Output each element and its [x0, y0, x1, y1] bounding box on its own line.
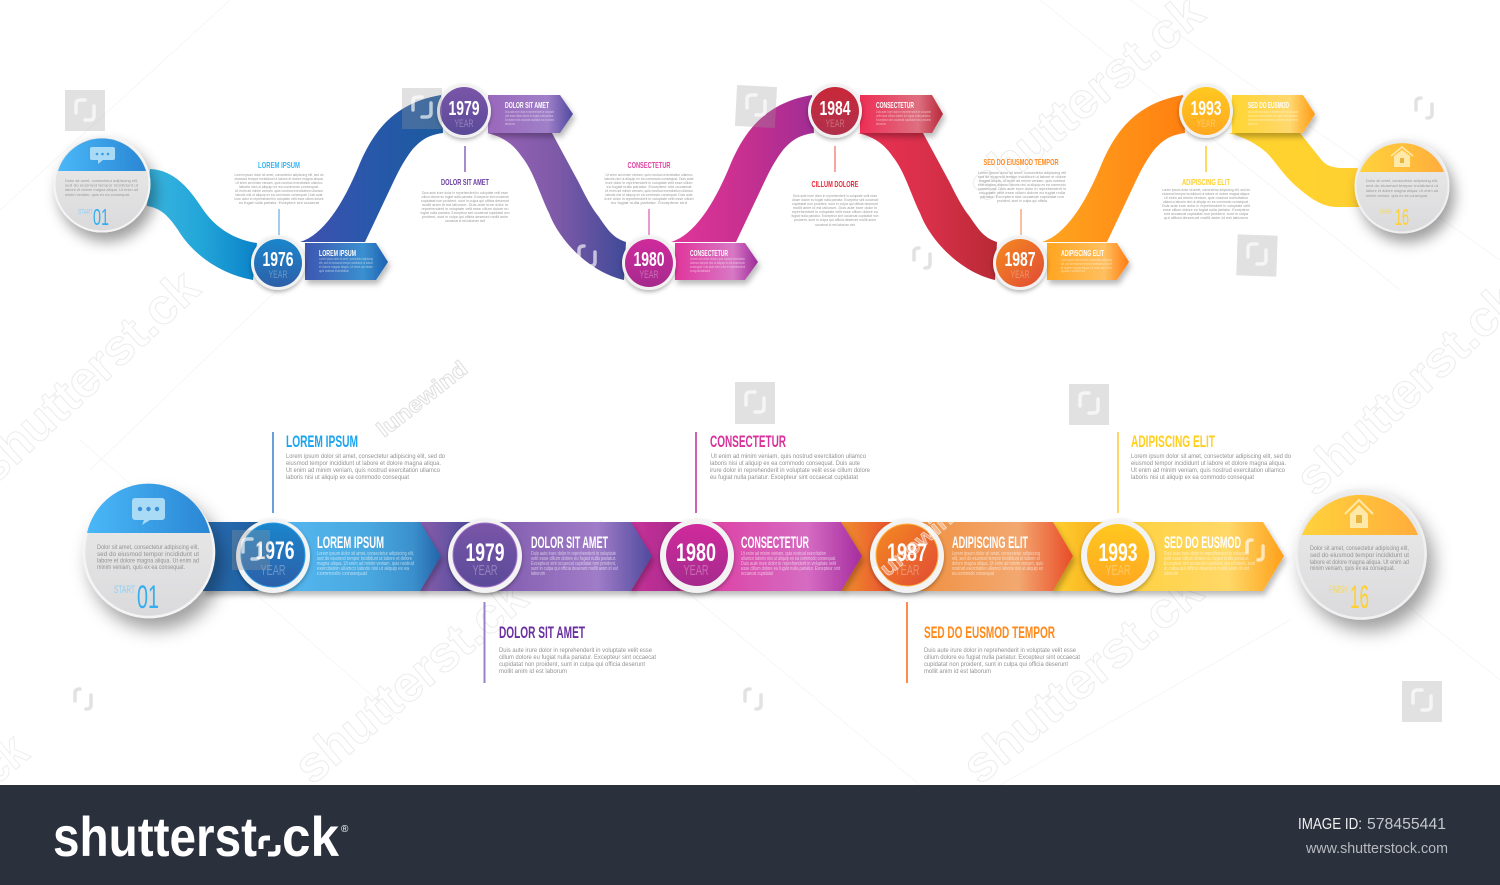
note: consectetur (top) — [604, 160, 694, 205]
band segment: 1980 magenta — [630, 522, 862, 591]
arrow tag: 1987: Lorem ipsum dolor sit amet, consectetur adipiscing — [1061, 258, 1112, 262]
finish circle large: FINISH — [1329, 584, 1347, 596]
year node: 1980: YEAR — [640, 269, 659, 281]
band text: consectetur — [741, 534, 840, 577]
note: sed do eiusmod tempor (top): Lorem ipsum dolor sit amet, consectetur adipiscing elit — [978, 170, 1067, 175]
start circle — [54, 136, 150, 232]
note: cillum dolore (top) — [792, 179, 879, 227]
arrow tag: 1984: velit esse cillum dolore eu fugiat nulla pariatur. — [876, 114, 931, 118]
year node: 1979 large: 1979 — [466, 539, 504, 567]
band text: lorem ipsum: LOREM IPSUM — [317, 534, 384, 552]
start cap large — [87, 484, 210, 533]
start circle text: sed do eiusmod tempor incididunt ut — [65, 182, 139, 188]
note: adipiscing elit (top): eiusmod tempor incididunt ut labore et dolore magna aliqua. — [1162, 191, 1250, 196]
note: consectetur (bottom): eu fugiat nulla pariatur. Excepteur sint occaecat cupidatat — [710, 475, 858, 481]
note: lorem ipsum (top): laboris nisi ut aliquip ex ea commodo consequat. Duis aute — [236, 192, 323, 197]
band text: lorem ipsum: Lorem ipsum dolor sit amet, consectetur adipiscing elit, — [317, 551, 414, 557]
start text large: labore et dolore magna aliqua. Ut enim ad — [97, 558, 199, 564]
finish circle text: minim veniam, quis ex ea consequat. — [1366, 193, 1428, 198]
note: lorem ipsum (bottom): eiusmod tempor incididunt ut labore et dolore magna aliqua. — [286, 461, 441, 467]
arrow tag: 1993: velit esse cillum dolore eu fugiat nulla pariatur. — [1248, 114, 1298, 118]
year node: 1980 large: YEAR — [684, 562, 709, 579]
arrow tag: 1976: elit, sed do eiusmod tempor incididunt ut labore — [319, 261, 373, 265]
image id — [1298, 816, 1446, 833]
year node: 1987: YEAR — [1010, 269, 1030, 281]
finish circle large — [1296, 490, 1426, 618]
arrow tag: 1987: quis nostrud — [1061, 269, 1085, 273]
arrow tag: 1976 — [305, 243, 388, 280]
arrow tag: 1976: LOREM IPSUM — [319, 248, 356, 258]
note: lorem ipsum (bottom): LOREM IPSUM — [286, 432, 358, 451]
bottom straight timeline — [84, 432, 1426, 683]
note: lorem ipsum (bottom): Lorem ipsum dolor sit amet, consectetur adipiscing elit, sed do — [286, 454, 446, 460]
footer logo: ck — [282, 805, 340, 868]
arrow tag: 1987: ADIPISCING ELIT — [1061, 248, 1104, 258]
band text: dolor sit amet: Excepteur sint occaecat cupidatat non proident, — [531, 561, 616, 567]
arrow tag: 1984: CONSECTETUR — [876, 100, 914, 110]
note: lorem ipsum (top): Lorem ipsum dolor sit amet, consectetur adipiscing elit, sed do — [234, 172, 324, 177]
band text: consectetur: Ut enim ad minim veniam, quis nostrud exercitation — [741, 551, 826, 557]
finish circle cap — [1360, 143, 1444, 172]
arrow tag: 1979 — [488, 95, 573, 133]
note: sed do eusmod tempor (bottom): cupidatat non proident, sunt in culpa qui officia deserunt — [924, 662, 1068, 668]
start number: 01 — [93, 204, 109, 230]
image id: 578455441 — [1367, 816, 1446, 833]
note: sed do eusmod tempor (bottom): Duis aute irure dolor in reprehenderit in voluptate velit esse — [924, 648, 1077, 654]
year node: 1993 large: 1993 — [1098, 539, 1138, 567]
arrow tag: 1984: Duis aute irure dolor in reprehenderit in voluptate — [876, 110, 931, 114]
band text: sed do eusmod: in culpa qui officia deserunt mollit anim id est — [1164, 566, 1250, 572]
note: adipiscing elit (top): esse cillum dolore eu fugiat nulla pariatur. Excepteur — [1163, 207, 1250, 212]
band text: adipiscing elit: ADIPISCING ELIT — [952, 534, 1028, 552]
arrow tag: 1987: et dolore magna aliqua. Ut enim ad minim — [1061, 266, 1112, 270]
year node: 1976 large — [236, 519, 310, 593]
arrow tag: 1979: DOLOR SIT AMET — [505, 100, 549, 110]
finish text large: minim veniam, quis ex ea consequat. — [1310, 566, 1395, 572]
website: www.shutterstock.com — [1305, 840, 1448, 857]
ribbon: 1987 to 1993 — [1042, 95, 1185, 242]
year node: 1993 large: YEAR — [1106, 562, 1131, 579]
band text: sed do eusmod: SED DO EUSMOD — [1164, 534, 1241, 552]
note: dolor sit amet (top): fugiat nulla pariatur. Excepteur sint occaecat cupidatat non — [420, 210, 510, 215]
band text: dolor sit amet: Duis aute irure dolor in reprehenderit in voluptate — [531, 551, 616, 557]
band text: sed do eusmod: Excepteur sint occaecat cupidatat non proident, sunt — [1164, 561, 1255, 567]
finish circle text: sed do eiusmod tempor incididunt ut — [1366, 183, 1439, 188]
note: dolor sit amet (top): reprehenderit in voluptate velit esse cillum dolore eu — [422, 206, 508, 211]
arrow tag: 1984: Excepteur sint occaecat cupidatat non proident — [876, 118, 931, 122]
ribbon: 1993 to finish — [1228, 133, 1362, 207]
note: adipiscing elit (bottom): ADIPISCING ELIT — [1131, 432, 1215, 451]
year node: 1993 — [1179, 84, 1233, 138]
note: dolor sit amet (top): occaecat id est laborum sint — [445, 218, 486, 223]
note: consectetur (top): CONSECTETUR — [628, 160, 670, 170]
finish number large: 16 — [1350, 579, 1369, 615]
arrow tag: 1979: velit esse cillum dolore eu fugiat nulla pariatur. — [505, 114, 554, 118]
note: lorem ipsum (top): laboris nisi ut aliquip ex ea commodo consequat. — [239, 184, 319, 189]
year node: 1993: YEAR — [1196, 118, 1216, 130]
band text: consectetur: ullamco laboris nisi ut aliquip ex ea commodo consequat. — [741, 556, 836, 562]
note: dolor sit amet (bottom) — [484, 602, 656, 683]
watermark: lunewind: lunewind — [372, 356, 472, 442]
note: adipiscing elit (top): sint occaecat cupidatat non proident, sunt in culpa — [1164, 211, 1249, 216]
year node: 1984: 1984 — [820, 98, 851, 120]
note: consectetur (top): eu fugiat nulla pariatur. Excepteur sint — [611, 200, 688, 205]
image id: IMAGE ID: — [1298, 816, 1362, 833]
band text: consectetur: occaecat cupidatat — [741, 571, 773, 577]
arrow tag: 1980: ullamco laboris nisi ut aliquip ex ea commodo — [690, 261, 745, 265]
note: sed do eusmod tempor (bottom) — [906, 602, 1080, 683]
year node: 1987 — [993, 236, 1047, 290]
note: adipiscing elit (bottom): Ut enim ad minim veniam, quis nostrud exercitation ullamco — [1131, 468, 1286, 474]
footer logo: ® — [341, 824, 349, 835]
year node: 1980: 1980 — [634, 249, 664, 271]
ribbon: 1976 to 1979 — [300, 95, 443, 242]
start text large: sed do eiusmod tempor incididunt ut — [97, 552, 199, 558]
band text: dolor sit amet: DOLOR SIT AMET — [531, 534, 608, 552]
note: dolor sit amet (top): cillum dolore eu fugiat nulla pariatur. Excepteur sint occaecat — [422, 194, 509, 199]
watermark: shutterstock lower right: shutterst.ck — [951, 562, 1213, 794]
start number large: 01 — [137, 579, 159, 615]
arrow tag: 1980: Ut enim ad minim veniam, quis nostrud exercitation — [690, 257, 745, 261]
note: sed do eiusmod tempor (top): magna aliqua. Ut enim ad minim veniam, quis nostrud — [979, 178, 1065, 183]
arrow tag: 1979: Excepteur sint occaecat cupidatat non proident — [505, 118, 554, 122]
note: dolor sit amet (top): mollit anim id est laborum. Duis aute irure dolor in — [422, 202, 508, 207]
note: adipiscing elit (top): Lorem ipsum dolor sit amet, consectetur adipiscing elit, sed do — [1162, 187, 1251, 192]
note: cillum dolore (top): reprehenderit in voluptate velit esse cillum dolore eu — [792, 209, 878, 214]
note: consectetur (bottom): CONSECTETUR — [710, 432, 786, 451]
arrow tag: 1979: laborum — [505, 122, 515, 126]
band text: lorem ipsum: magna aliqua. Ut enim ad minim veniam, quis nostrud — [317, 561, 414, 567]
note: adipiscing elit (top): ADIPISCING ELIT — [1182, 177, 1231, 187]
year node: 1987 large: 1987 — [887, 539, 927, 567]
year node: 1987 large — [870, 519, 944, 593]
year node: 1980 — [622, 236, 676, 290]
icon: house — [1391, 147, 1413, 167]
band text: consectetur: Duis aute irure dolor in reprehenderit in voluptate velit — [741, 561, 836, 567]
icon: house large — [1345, 500, 1373, 528]
arrow tag: 1976: et dolore magna aliqua. Ut enim ad minim — [319, 265, 373, 269]
arrow tag: 1993: Excepteur sint occaecat cupidatat non proident — [1248, 118, 1298, 122]
note: cillum dolore (top): mollit anim id est laborum. Duis aute irure dolor in — [793, 205, 877, 210]
note: dolor sit amet (top) — [420, 177, 510, 223]
arrow tag: 1976: quis nostrud exercitation — [319, 269, 349, 273]
year node: 1976: 1976 — [262, 249, 294, 271]
note: consectetur (bottom): irure dolor in reprehenderit in voluptate velit esse cillum dolore — [710, 468, 871, 474]
note: adipiscing elit (top) — [1162, 177, 1251, 220]
note: cillum dolore (top): cillum dolore eu fugiat nulla pariatur. Excepteur sint occaecat — [792, 197, 879, 202]
start label large: START — [114, 584, 135, 596]
note: sed do eiusmod tempor (top): sed do eiusmod tempor incididunt ut labore et dolore — [978, 174, 1067, 179]
band text: dolor sit amet: laborum — [531, 571, 545, 577]
note: sed do eiusmod tempor (top): SED DO EIUSMOD TEMPOR — [984, 157, 1058, 167]
year node: 1976 — [251, 236, 305, 290]
start text large — [97, 545, 199, 571]
band segment: 1987 orange — [841, 522, 1073, 591]
note: consectetur (top): Ut enim ad minim veniam, quis nostrud exercitation ullamco — [605, 188, 694, 193]
year node: 1993 large — [1081, 519, 1155, 593]
connector: 1987 — [1020, 209, 1022, 235]
start circle large — [84, 484, 214, 617]
finish circle — [1356, 140, 1448, 232]
note: dolor sit amet (bottom): cillum dolore eu fugiat nulla pariatur. Excepteur sint occaecat — [499, 655, 656, 661]
arrow tag: 1980: CONSECTETUR — [690, 248, 728, 258]
year node: 1976 large: YEAR — [260, 562, 286, 579]
start circle cap — [58, 138, 146, 171]
note: lorem ipsum (top): eu fugiat nulla pariatur. Excepteur sint occaecat — [239, 200, 320, 205]
note: adipiscing elit (top): Duis aute irure dolor in reprehenderit in voluptate velit — [1162, 203, 1251, 208]
arrow tag: 1976: Lorem ipsum dolor sit amet, consectetur adipiscing — [319, 257, 373, 261]
note: cillum dolore (top): fugiat nulla pariatur. Excepteur sint occaecat cupidatat non — [792, 213, 878, 218]
note: consectetur (top): laboris nisi ut aliquip ex ea commodo consequat. Duis aute — [604, 176, 694, 181]
icon: speech bubble large — [132, 498, 165, 525]
year node: 1993: 1993 — [1190, 98, 1222, 120]
band text: lorem ipsum: commodo consequat — [317, 571, 368, 577]
year node: 1979 large — [448, 519, 522, 593]
note: sed do eiusmod tempor (top): proident, sunt in culpa qui officia — [997, 198, 1048, 203]
band segment: 1976 blue — [203, 522, 441, 591]
note: sed do eiusmod tempor (top): exercitation ullamco laboris nisi ut aliquip ex ea commodo — [978, 182, 1067, 187]
finish text large — [1310, 546, 1409, 572]
year node: 1987 large: YEAR — [894, 562, 920, 579]
start circle text — [65, 178, 139, 197]
note: consectetur (top): eu fugiat nulla pariatur. Excepteur sint occaecat — [606, 184, 692, 189]
note: cillum dolore (top): Duis aute irure dolor in reprehenderit in voluptate velit esse — [793, 193, 878, 198]
arrow tag: 1984 — [860, 95, 943, 133]
arrow tag: 1993 — [1232, 95, 1315, 133]
note: sed do eusmod tempor (bottom): SED DO EUSMOD TEMPOR — [924, 623, 1055, 642]
footer bar — [0, 785, 1500, 885]
start text large: minim veniam, quis ex ea consequat. — [97, 565, 185, 571]
arrow tag: 1980 — [675, 243, 758, 280]
year node: 1976: YEAR — [268, 269, 288, 281]
note: sed do eiusmod tempor (top): voluptate velit esse cillum dolore eu fugiat nulla — [979, 190, 1066, 195]
note: cillum dolore (top): CILLUM DOLORE — [812, 179, 859, 189]
note: adipiscing elit (top): Ut enim ad minim veniam, quis nostrud exercitation — [1164, 195, 1248, 200]
note: adipiscing elit (bottom): Lorem ipsum dolor sit amet, consectetur adipiscing elit, sed do — [1131, 454, 1292, 460]
note: lorem ipsum (top): LOREM IPSUM — [258, 160, 300, 170]
finish cap large — [1302, 495, 1418, 535]
band text: sed do eusmod: Duis aute irure dolor in reprehenderit in voluptate — [1164, 551, 1249, 557]
note: dolor sit amet (bottom): Duis aute irure dolor in reprehenderit in voluptate velit esse — [499, 648, 653, 654]
note: dolor sit amet (top): DOLOR SIT AMET — [441, 177, 490, 187]
note: lorem ipsum (top) — [234, 160, 324, 205]
year node: 1980 large: 1980 — [676, 539, 716, 567]
ribbon: 1979 to 1980 — [487, 133, 626, 280]
band text: sed do eusmod: velit esse cillum dolore eu fugiat nulla pariatur. — [1164, 556, 1249, 562]
arrow tag: 1984: laborum — [876, 122, 886, 126]
start circle text: labore et dolore magna aliqua. Ut enim ad — [65, 187, 138, 192]
note: lorem ipsum (top): irure dolor in reprehenderit in voluptate velit esse cillum dolore — [234, 196, 324, 201]
note: lorem ipsum (bottom): laboris nisi ut aliquip ex ea commodo consequat — [286, 475, 409, 481]
note: consectetur (bottom): Ut enim ad minim veniam, quis nostrud exercitation ullamco — [711, 454, 867, 460]
arrow tag: 1987: elit, sed do eiusmod tempor incididunt ut labore — [1061, 262, 1112, 266]
footer logo: shutterst — [53, 805, 257, 868]
note: cillum dolore (top): occaecat id est laborum sint — [815, 222, 856, 227]
note: cillum dolore (top): cupidatat non proident, sunt in culpa qui officia deserunt — [792, 201, 879, 206]
band text: adipiscing elit: dolore magna aliqua. Ut enim ad minim veniam, quis — [952, 561, 1043, 567]
note: adipiscing elit (bottom): laboris nisi ut aliquip ex ea commodo consequat — [1131, 475, 1254, 481]
band text: adipiscing elit — [952, 534, 1043, 577]
note: dolor sit amet (top): proident, sunt in culpa qui officia deserunt mollit anim — [422, 214, 509, 219]
note: dolor sit amet (bottom): DOLOR SIT AMET — [499, 623, 585, 642]
arrow tag: 1979: Duis aute irure dolor in reprehenderit in voluptate — [505, 110, 554, 114]
year node: 1979: 1979 — [448, 98, 480, 120]
note: dolor sit amet (top): cupidatat non proident, sunt in culpa qui officia deserunt — [421, 198, 510, 203]
note: adipiscing elit (top): ullamco laboris nisi ut aliquip ex ea commodo consequat. — [1163, 199, 1249, 204]
note: dolor sit amet (bottom): cupidatat non proident, sunt in culpa qui officia deserunt — [499, 662, 645, 668]
note: lorem ipsum (top): eiusmod tempor incididunt ut labore et dolore magna aliqua. — [234, 176, 324, 181]
band text: lorem ipsum: exercitation ullamco laboris nisi ut aliquip ex ea — [317, 566, 409, 572]
year node: 1979 — [437, 84, 491, 138]
connector: 1984 — [834, 146, 836, 172]
finish circle text — [1366, 178, 1439, 198]
ribbon: 1984 to 1987 — [858, 133, 997, 280]
connector: 1993 — [1205, 146, 1207, 172]
note: lorem ipsum (bottom) — [272, 432, 446, 513]
note: consectetur (top): laboris nisi ut aliquip ex ea commodo consequat. Duis aute — [606, 192, 693, 197]
finish label: FINISH — [1380, 209, 1392, 216]
band text: adipiscing elit: ea commodo consequat — [952, 571, 994, 577]
band text: sed do eusmod — [1164, 534, 1255, 577]
ribbon: start to 1976 — [147, 169, 257, 280]
band segment: 1979 purple — [420, 522, 652, 591]
note: sed do eusmod tempor (bottom): cillum dolore eu fugiat nulla pariatur. Excepteur sint occaecat — [924, 655, 1080, 661]
note: cillum dolore (top): proident, sunt in culpa qui officia deserunt mollit anim — [794, 217, 877, 222]
band text: lorem ipsum: sed do eiusmod tempor incididunt ut labore et dolore — [317, 556, 412, 562]
band text: adipiscing elit: elit, sed do eiusmod tempor incididunt ut labore et — [952, 556, 1040, 562]
finish number: 16 — [1395, 204, 1409, 230]
watermark tiles — [65, 85, 1442, 722]
note: lorem ipsum (top): Ut enim ad minim veniam, quis nostrud exercitation ullamco — [236, 180, 323, 185]
band text: adipiscing elit: Lorem ipsum dolor sit amet, consectetur adipiscing — [952, 551, 1040, 557]
note: sed do eusmod tempor (bottom): mollit anim id est laborum — [924, 669, 991, 675]
connector: 1979 — [464, 146, 466, 172]
band text: adipiscing elit: nostrud exercitation ullamco laboris nisi ut aliquip ex — [952, 566, 1043, 572]
band text: dolor sit amet — [531, 534, 618, 577]
year node: 1979 large: YEAR — [472, 562, 498, 579]
connector: 1976 — [278, 209, 280, 235]
start label: START — [78, 209, 93, 216]
band text: sed do eusmod: laborum — [1164, 571, 1178, 577]
band text: lorem ipsum — [317, 534, 414, 577]
year node: 1979: YEAR — [454, 118, 474, 130]
note: adipiscing elit (bottom) — [1117, 432, 1292, 513]
finish text large: Dolor sit amet, consectetur adipiscing elit, — [1310, 546, 1409, 552]
note: lorem ipsum (bottom): Ut enim ad minim veniam, quis nostrud exercitation ullamco — [286, 468, 441, 474]
note: consectetur (top): Ut enim ad minim veniam, quis nostrud exercitation ullamco — [606, 172, 693, 177]
arrow tag: 1980: cupidatat — [690, 269, 710, 273]
arrow tag: 1993: Duis aute irure dolor in reprehenderit in voluptate — [1248, 110, 1298, 114]
year node: 1976 large: 1976 — [256, 537, 294, 565]
note: consectetur (bottom): laboris nisi ut aliquip ex ea commodo consequat. Duis aute — [710, 461, 861, 467]
top wave timeline — [54, 84, 1448, 290]
band text: consectetur: CONSECTETUR — [741, 534, 809, 552]
note: dolor sit amet (bottom): mollit anim id est laborum — [499, 669, 567, 675]
finish circle text: labore et dolore magna aliqua. Ut enim ad — [1366, 188, 1438, 193]
band text: consectetur: esse cillum dolore eu fugiat nulla pariatur. Excepteur sint — [741, 566, 840, 572]
start circle text: Dolor sit amet, consectetur adipiscing elit, — [65, 178, 138, 183]
finish text large: labore et dolore magna aliqua. Ut enim ad — [1310, 560, 1409, 566]
note: adipiscing elit (bottom): eiusmod tempor incididunt ut labore et dolore magna aliqua. — [1131, 461, 1286, 467]
connector: 1980 — [648, 209, 650, 235]
year node: 1984: YEAR — [826, 118, 845, 130]
arrow tag: 1980: consequat. Duis aute irure dolor in reprehenderit — [690, 265, 745, 269]
note: sed do eiusmod tempor (top): consequat. Duis aute irure dolor in reprehenderit in — [978, 186, 1066, 191]
note: sed do eiusmod tempor (top) — [978, 157, 1067, 203]
band segment: 1993 yellow — [1053, 522, 1284, 591]
note: consectetur (bottom) — [695, 432, 871, 513]
note: adipiscing elit (top): qui officia deserunt mollit anim id est laborum — [1164, 215, 1249, 220]
arrow tag: 1993: SED DO EUSMOD — [1248, 100, 1289, 110]
year node: 1984 — [808, 84, 862, 138]
finish circle text: Dolor sit amet, consectetur adipiscing elit, — [1366, 178, 1438, 183]
watermark: shutterstock lower centre: shutterst.ck — [283, 568, 538, 794]
band text: dolor sit amet: velit esse cillum dolore eu fugiat nulla pariatur. — [531, 556, 616, 562]
arrow tag: 1987 — [1047, 243, 1129, 280]
year node: 1987: 1987 — [1004, 249, 1036, 271]
watermark: lunewind on band: lunewind — [869, 496, 969, 586]
note: consectetur (top): irure dolor in reprehenderit in voluptate velit esse cillum — [606, 180, 693, 185]
note: sed do eiusmod tempor (top): pariatur. Excepteur sint occaecat cupidatat non — [980, 194, 1064, 199]
finish text large: sed do eiusmod tempor incididunt ut — [1310, 553, 1409, 559]
arrow tag: 1993: laborum — [1248, 122, 1258, 126]
note: consectetur (top): irure dolor in reprehenderit in voluptate velit esse cillum — [604, 196, 694, 201]
start circle text: minim veniam, quis ex ea consequat. — [65, 192, 130, 197]
note: dolor sit amet (top): Duis aute irure dolor in reprehenderit in voluptate velit esse — [422, 190, 509, 195]
start text large: Dolor sit amet, consectetur adipiscing elit, — [97, 545, 199, 551]
ribbon: 1980 to 1984 — [671, 95, 814, 242]
note: lorem ipsum (top): Ut enim ad minim veniam, quis nostrud exercitation ullamco — [235, 188, 324, 193]
icon: speech bubble — [90, 147, 115, 164]
year node: 1980 large — [660, 519, 734, 593]
band text: dolor sit amet: sunt in culpa qui officia deserunt mollit anim id est — [531, 566, 618, 572]
